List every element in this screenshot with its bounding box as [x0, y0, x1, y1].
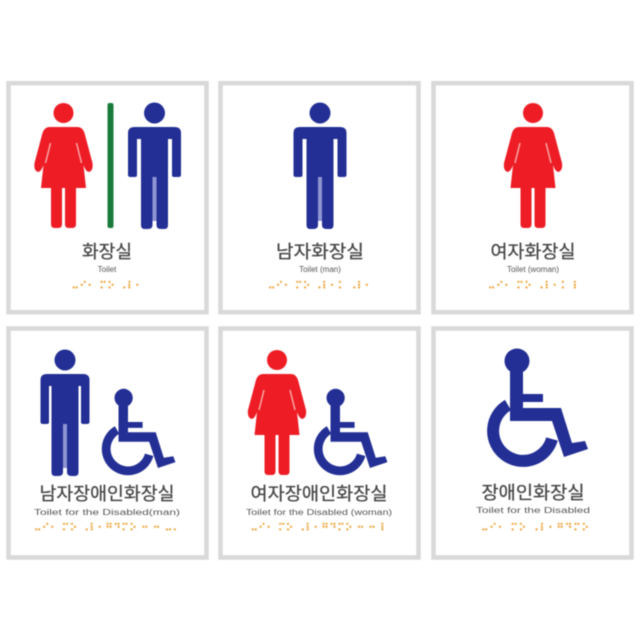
braille: ⠤⠊⠂ ⠍⠕ ⠠⠇⠂⠛⠙⠍⠕ ⠒ ⠒ ⠤⠄	[34, 523, 180, 534]
braille: ⠤⠊⠂ ⠍⠕ ⠠⠇⠂⠅ ⠇	[488, 281, 580, 292]
label: korean: 남자장애인화장실	[40, 484, 174, 504]
label: english: Toilet (man)	[299, 265, 341, 274]
braille: ⠤⠊⠂ ⠍⠕ ⠠⠇⠂⠛⠙⠍⠕ ⠒ ⠒ ⠇	[250, 523, 388, 534]
label: english: Toilet (woman)	[507, 265, 559, 274]
icon: wheelchair	[318, 389, 387, 471]
icon: woman	[248, 350, 306, 475]
label: korean: 여자장애인화장실	[250, 484, 388, 504]
label: korean: 화장실	[82, 242, 132, 262]
panel: toilet	[8, 83, 206, 312]
braille: ⠤⠊⠂ ⠍⠕ ⠠⠇⠂	[72, 281, 142, 292]
icon: woman	[34, 103, 93, 228]
icon: wheelchair	[493, 348, 588, 461]
label: english: Toilet for the Disabled	[476, 506, 590, 515]
panel: accessible toilet	[434, 328, 632, 558]
label: english: Toilet for the Disabled(man)	[34, 508, 180, 517]
label: english: Toilet	[98, 265, 117, 274]
label: korean: 여자화장실	[490, 242, 576, 262]
panel: women's toilet	[434, 83, 632, 312]
icon: man	[128, 102, 181, 229]
panel: women's accessible toilet	[220, 328, 418, 558]
divider: green line	[108, 103, 114, 228]
icon: man	[294, 102, 346, 229]
label: english: Toilet for the Disabled (woman)	[246, 508, 392, 517]
panel: men's toilet	[220, 83, 418, 312]
icon: wheelchair	[106, 389, 175, 471]
icon: man	[40, 350, 90, 476]
panel: men's accessible toilet	[8, 328, 206, 558]
icon: woman	[504, 103, 562, 228]
label: korean: 장애인화장실	[482, 483, 584, 503]
braille: ⠤⠊⠂ ⠍⠕ ⠠⠇⠂⠅ ⠠⠇⠂	[268, 281, 372, 292]
braille: ⠤⠊⠂ ⠍⠕ ⠠⠇⠂⠛⠙⠍⠕	[481, 523, 589, 534]
label: korean: 남자화장실	[276, 242, 364, 262]
